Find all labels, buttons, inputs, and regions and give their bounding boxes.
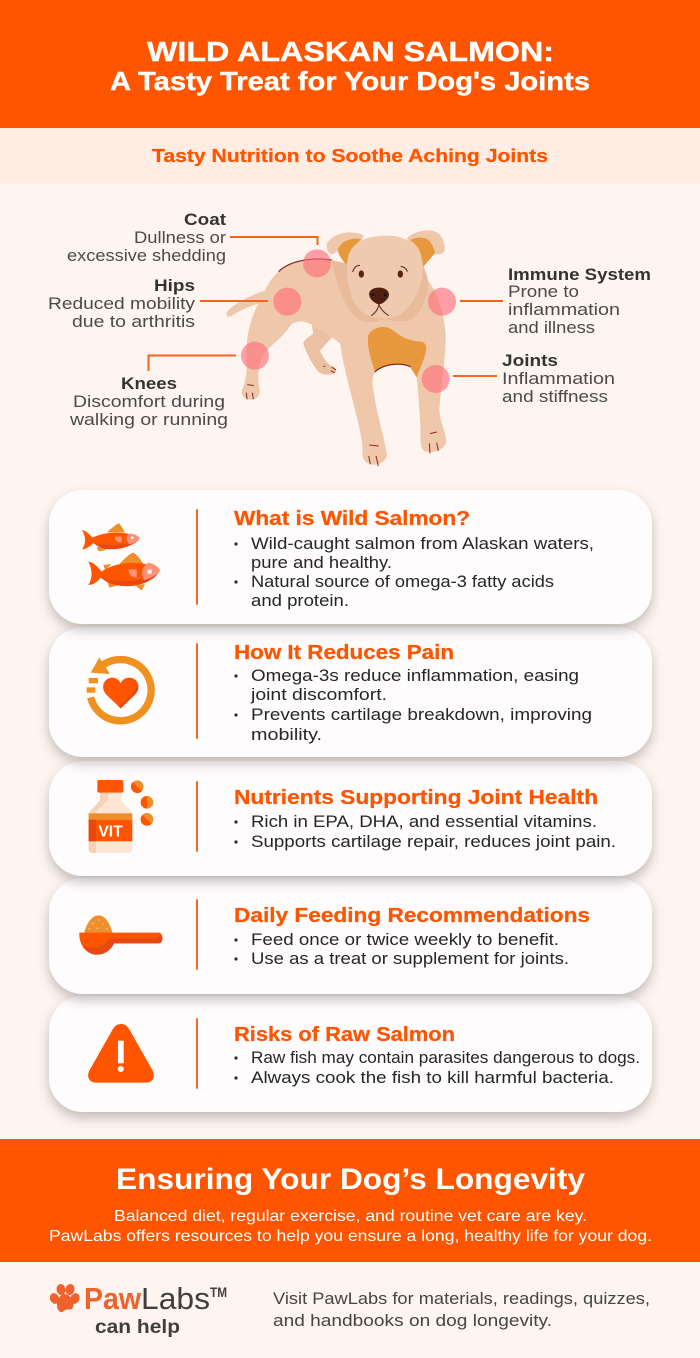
title: WILD ALASKAN SALMON: <box>147 36 554 67</box>
logo: PawLabs: Paw <box>84 1281 142 1316</box>
text block: mobility. <box>251 725 322 744</box>
icon: salmon <box>82 523 160 591</box>
text block: Use as a treat or supplement for joints. <box>251 949 569 968</box>
label: hips <box>48 276 268 331</box>
title: A Tasty Treat for Your Dog's Joints <box>110 66 590 96</box>
label: immune system: inflammation <box>508 300 620 319</box>
text block: joint discomfort. <box>250 685 387 704</box>
subheading band: Tasty Nutrition to Soothe Aching Joints <box>152 145 548 166</box>
panel: how it reduces pain <box>49 627 652 757</box>
icon: heart with circular arrow <box>87 658 151 721</box>
footer banner <box>0 1139 700 1262</box>
label: hips: Hips <box>154 276 195 295</box>
text block: Prevents cartilage breakdown, improving <box>251 705 592 724</box>
logo: PawLabs: Labs <box>141 1281 210 1316</box>
icon: vitamin bottle <box>89 780 153 853</box>
label: knees: Knees <box>121 374 177 393</box>
closing text <box>273 1290 650 1330</box>
closing text: Visit PawLabs for materials, readings, quizzes, <box>273 1290 650 1308</box>
label: knees: walking or running <box>69 410 228 429</box>
text block <box>234 508 594 610</box>
label: joints: and stiffness <box>502 387 608 406</box>
icon: paw <box>48 1283 81 1312</box>
text block: Feed once or twice weekly to benefit. <box>251 930 559 949</box>
text block: Supports cartilage repair, reduces joint pain. <box>251 832 616 851</box>
label: immune system <box>460 265 651 337</box>
panel: risks of raw salmon <box>49 996 652 1112</box>
neck fold <box>332 261 428 322</box>
text block: How It Reduces Pain <box>234 642 454 664</box>
label: hips: Reduced mobility <box>48 294 196 313</box>
inflammation markers <box>241 249 456 393</box>
footer heading: Ensuring Your Dog’s Longevity <box>116 1163 585 1196</box>
text block: and protein. <box>251 591 349 610</box>
label: coat: Dullness or <box>134 228 226 247</box>
logo: PawLabs: TM <box>210 1284 227 1300</box>
head <box>347 236 423 318</box>
text block: Raw fish may contain parasites dangerous to dogs. <box>251 1048 640 1067</box>
label: joints: Inflammation <box>502 369 615 388</box>
footer text: PawLabs offers resources to help you ensure a long, healthy life for your dog. <box>49 1228 652 1245</box>
text block: Nutrients Supporting Joint Health <box>234 787 598 809</box>
panel: nutrients supporting joint health <box>49 761 652 876</box>
text block: pure and healthy. <box>251 553 392 572</box>
label: immune system: and illness <box>508 318 595 337</box>
icon: scoop <box>79 915 162 955</box>
closing text: and handbooks on dog longevity. <box>273 1312 552 1330</box>
text block: Always cook the fish to kill harmful bacteria. <box>251 1068 614 1087</box>
panel: what is wild salmon <box>49 490 652 624</box>
label: hips: due to arthritis <box>72 312 195 331</box>
text block: Daily Feeding Recommendations <box>234 905 590 927</box>
text block <box>234 905 590 968</box>
text block: Wild-caught salmon from Alaskan waters, <box>251 534 594 553</box>
title <box>110 36 590 96</box>
text block: Rich in EPA, DHA, and essential vitamins. <box>251 812 597 831</box>
logo: PawLabs: can help <box>95 1317 180 1338</box>
text block: Omega-3s reduce inflammation, easing <box>251 666 579 685</box>
label: joints <box>453 351 615 406</box>
text block <box>234 787 616 851</box>
text block: Risks of Raw Salmon <box>234 1024 455 1046</box>
text block <box>234 1024 640 1087</box>
icon: warning triangle <box>88 1024 154 1083</box>
dog illustration <box>226 230 456 466</box>
text block: Natural source of omega-3 fatty acids <box>251 572 554 591</box>
text block <box>234 642 592 744</box>
label: coat <box>67 210 318 265</box>
footer text <box>49 1208 652 1245</box>
label: immune system: Prone to <box>508 282 579 301</box>
label: coat: Coat <box>184 210 226 229</box>
label: coat: excessive shedding <box>67 246 226 265</box>
logo: PawLabs <box>48 1281 227 1338</box>
label: immune system: Immune System <box>508 265 651 284</box>
icon: vitamin bottle: VIT <box>98 824 123 841</box>
text block: What is Wild Salmon? <box>234 508 470 530</box>
footer text: Balanced diet, regular exercise, and routine vet care are key. <box>114 1208 587 1225</box>
panel: daily feeding recommendations <box>49 878 652 994</box>
ears <box>327 232 364 267</box>
header banner <box>0 0 700 128</box>
label: knees <box>69 356 236 429</box>
label: joints: Joints <box>502 351 558 370</box>
label: knees: Discomfort during <box>73 392 225 411</box>
subheading band <box>0 128 700 184</box>
